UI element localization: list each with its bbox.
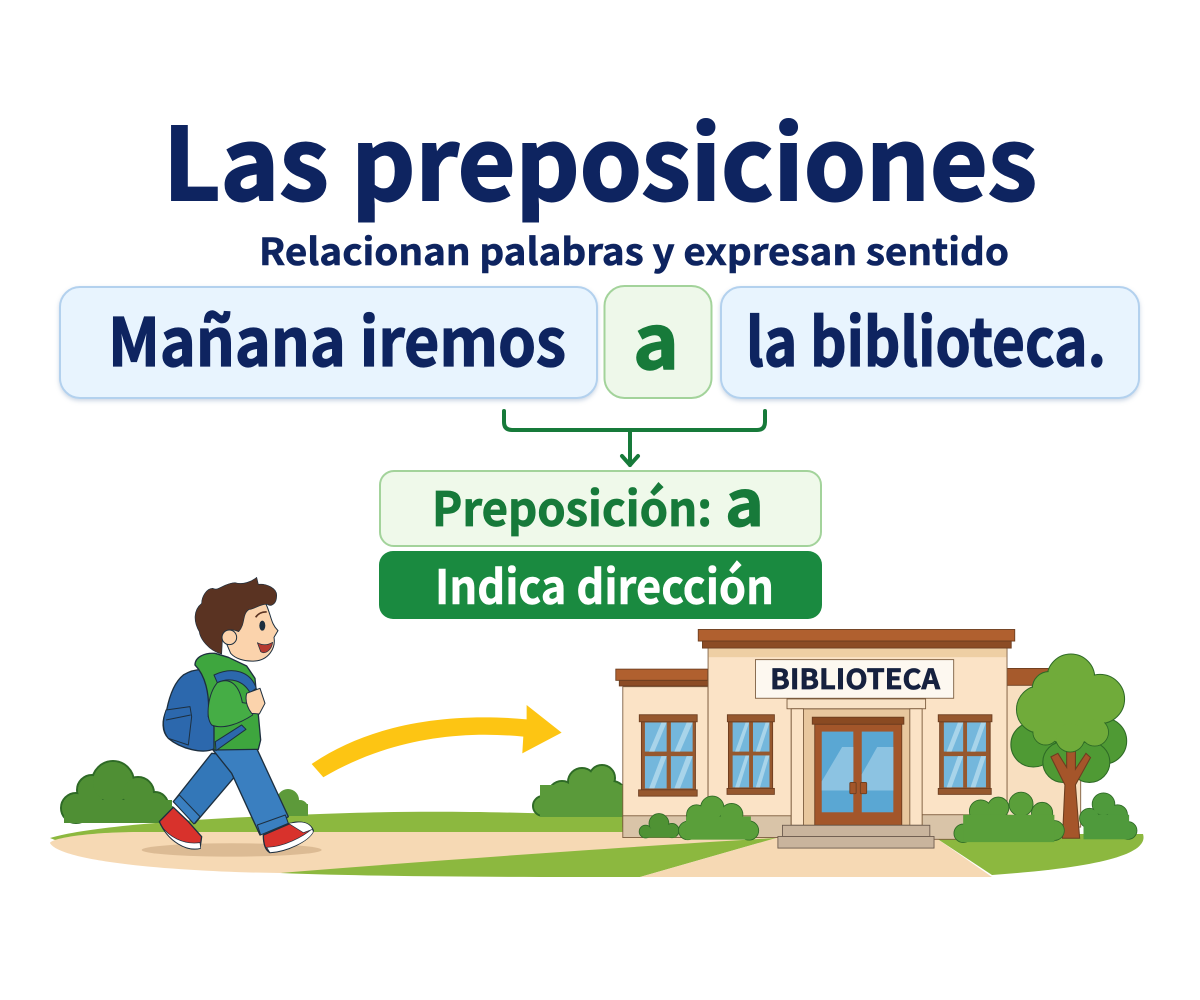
sentence part: preposition a: a	[633, 281, 679, 391]
tree trunk	[1051, 750, 1091, 838]
window 3	[938, 715, 992, 794]
title: Las preposiciones	[163, 84, 1037, 229]
arm	[208, 681, 253, 727]
panel: preposition label: Preposición:	[432, 471, 712, 540]
arrow: yellow direction	[312, 705, 562, 777]
arrow: bracket to preposition box	[504, 411, 765, 465]
bush: far right	[1080, 793, 1137, 839]
panel: meaning: Indica dirección	[435, 549, 774, 618]
entrance portico	[787, 699, 926, 825]
bush: right of building	[954, 792, 1064, 842]
bush: beside library	[533, 765, 626, 817]
sentence part: preposition a	[604, 281, 712, 398]
sentence part: Mañana iremos: Mañana iremos	[108, 290, 566, 386]
scene: ground	[50, 812, 1144, 877]
right shoe	[263, 822, 313, 853]
main roof	[698, 629, 1015, 641]
ear	[222, 630, 237, 645]
panel: sentence	[60, 281, 1139, 398]
sentence part: la biblioteca: la biblioteca.	[746, 290, 1106, 386]
steps	[778, 825, 934, 848]
window 2	[727, 715, 774, 794]
window 1	[639, 715, 697, 796]
subtitle: Relacionan palabras y expresan sentido	[259, 222, 1009, 276]
hair	[195, 577, 277, 654]
panel: preposition label: a	[725, 453, 764, 545]
eye	[259, 621, 265, 631]
bush: small left of building	[639, 814, 679, 838]
hoodie	[195, 653, 261, 750]
door	[812, 717, 904, 825]
front leg	[212, 748, 288, 835]
back leg	[173, 753, 243, 823]
sign: BIBLIOTECA	[770, 657, 940, 697]
mouth	[257, 642, 273, 653]
bush: center left of building	[679, 796, 759, 840]
tree crown	[1016, 654, 1125, 752]
backpack	[163, 670, 219, 751]
illustration: boy walking	[142, 577, 322, 857]
head	[225, 602, 278, 661]
bush: behind boy	[277, 789, 308, 816]
left shoe	[159, 807, 202, 849]
illustration: library building	[616, 629, 1137, 848]
strap	[214, 671, 256, 693]
right wing	[1007, 685, 1081, 827]
left wing	[623, 687, 708, 827]
eyebrow	[256, 612, 267, 617]
main wall	[708, 648, 1007, 827]
tree	[1011, 654, 1127, 838]
bush: left	[61, 761, 176, 823]
tree shade foliage	[1011, 718, 1127, 782]
panel: preposition label	[380, 453, 821, 546]
